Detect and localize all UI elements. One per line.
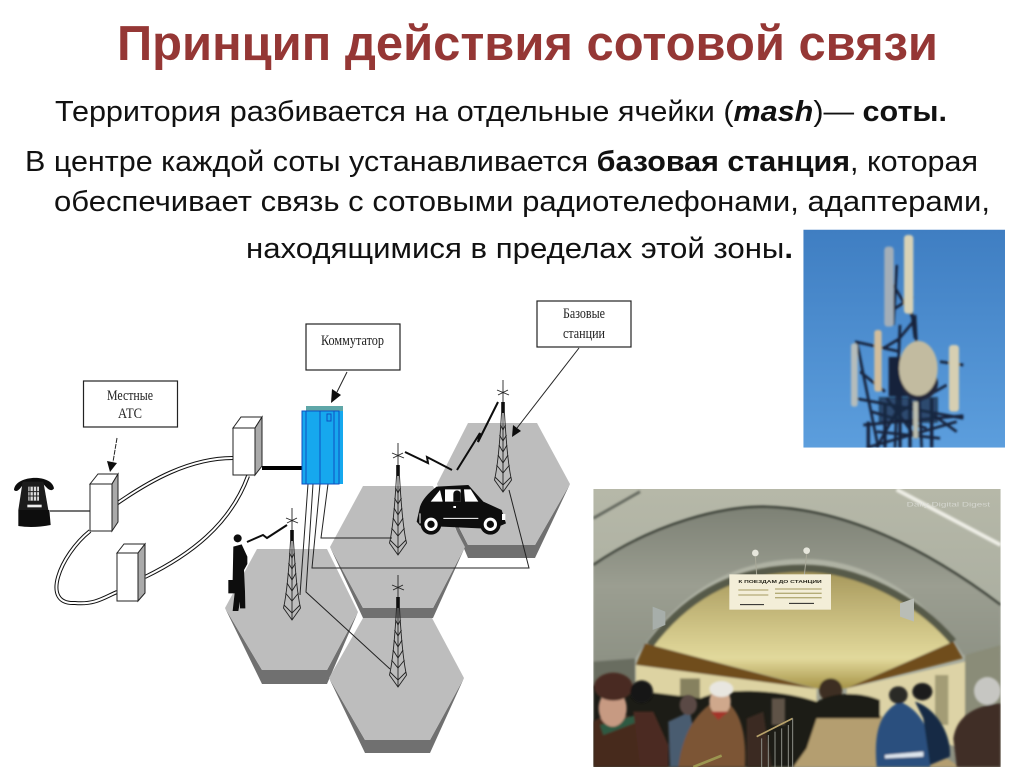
text block: description [25,96,990,265]
person [228,534,247,611]
arrow: switch [331,372,347,403]
people [593,673,1001,767]
label: local exchanges [84,381,178,427]
arrow: local exchange [107,438,117,472]
hex cell centre [330,486,465,618]
dish [902,377,940,400]
base station towers [284,380,512,687]
exchange box: local 3 [117,544,145,601]
text line 1: Территория разбивается на отдельные ячейки ( mash)— соты. [55,96,947,128]
crowd [593,685,880,767]
tunnel ceiling [650,568,953,688]
pillars [593,658,635,685]
car [417,485,506,535]
switch cabinet [302,406,343,484]
watermark: Daily Digital Digest [907,502,990,509]
antenna panels [884,247,894,327]
telephone [14,478,54,527]
tower centre [390,443,406,555]
hanging sign [729,574,831,610]
tunnel walls [636,665,817,718]
connecting lines [300,484,529,669]
label: switch [306,324,400,370]
label: base stations [537,301,631,347]
exchange box: local 2 [233,417,262,475]
hex cell bottom [329,618,464,753]
photo: metro underpass [593,489,1001,767]
railing [693,718,793,767]
text line 2: В центре каждой соты устанавливается базовая станция , которая [25,146,978,178]
hanging sign: К ПОЕЗДАМ ДО СТАНЦИИ [738,579,822,585]
label: base stations: станции [563,326,605,342]
photo: antenna tower [803,230,1005,448]
lattice [855,265,963,448]
tower left [284,508,300,620]
label: local exchanges: Местные [107,388,153,404]
label: base stations: Базовые [563,306,605,322]
tower right [494,380,512,492]
radio signals [247,402,498,542]
hex cell right [437,423,570,558]
cables [50,458,302,603]
hexagon cells [225,423,570,753]
label: switch: Коммутатор [321,333,384,349]
text line 3: обеспечивает связь с сотовыми радиотелефонами, адаптерами, [54,186,990,218]
label: local exchanges: АТС [118,406,142,422]
ceiling lamps [653,547,914,630]
tower bottom [390,575,406,687]
vault band [593,507,1001,665]
title: Принцип действия сотовой связи [117,17,938,71]
text line 4: находящимися в пределах этой зоны . [246,233,793,265]
hex cell left [225,549,358,684]
arrow: base stations [512,348,579,437]
exchange box: local 1 [90,474,118,531]
diagram: cellular network [14,301,631,753]
friezes [636,643,817,689]
floor [793,715,960,767]
